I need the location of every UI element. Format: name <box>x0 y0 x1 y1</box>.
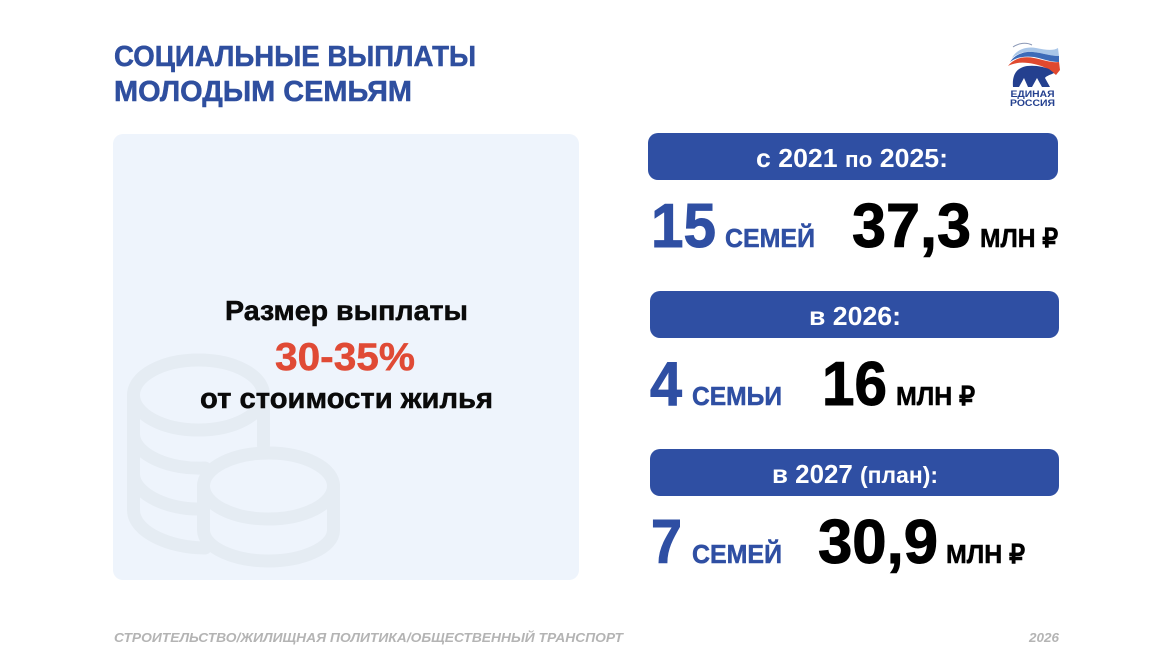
panel: payment size <box>113 134 579 580</box>
panel: 2021–2025: 37,3 <box>852 192 971 261</box>
icon: coins <box>134 360 334 561</box>
panel: 2021–2025: СЕМЕЙ <box>725 223 815 253</box>
title: СОЦИАЛЬНЫЕ ВЫПЛАТЫ <box>114 41 476 73</box>
text: payment size <box>200 295 493 415</box>
footer <box>114 629 1060 645</box>
panel: 2021–2025: 15 <box>651 192 716 261</box>
text: payment size: от стоимости жилья <box>200 383 493 415</box>
footer: 2026 <box>1028 630 1060 645</box>
logo: Единая Россия: ЕДИНАЯ <box>1010 89 1055 100</box>
panel: 2027 plan: 30,9 <box>818 508 938 577</box>
panel: 2026: СЕМЬИ <box>692 381 782 411</box>
panel: 2026: 16 <box>822 350 887 419</box>
panel: 2021–2025 <box>648 133 1058 261</box>
footer: СТРОИТЕЛЬСТВО/ЖИЛИЩНАЯ ПОЛИТИКА/ОБЩЕСТВЕННЫЙ ТРАНСПОРТ <box>114 629 624 645</box>
logo: Единая Россия: РОССИЯ <box>1010 98 1055 109</box>
panel: 2027 plan: в 2027 (план): <box>772 459 938 489</box>
text: payment size: Размер выплаты <box>225 295 468 326</box>
title: МОЛОДЫМ СЕМЬЯМ <box>114 76 412 108</box>
panel: 2027 plan <box>650 449 1059 577</box>
panel: 2027 plan: МЛН ₽ <box>946 539 1025 569</box>
panel: 2027 plan: СЕМЕЙ <box>692 539 782 569</box>
logo: Единая Россия <box>1008 43 1060 109</box>
title <box>114 41 476 108</box>
panel: 2026 <box>650 291 1059 419</box>
panel: 2026: 4 <box>650 350 682 419</box>
panel: 2026: в 2026: <box>809 301 901 331</box>
panel: 2021–2025: МЛН ₽ <box>980 223 1058 253</box>
text: payment size: 30-35% <box>275 336 415 379</box>
panel: 2027 plan: 7 <box>651 508 682 577</box>
panel: 2021–2025: с 2021 по 2025: <box>756 143 948 173</box>
panel: 2026: МЛН ₽ <box>896 381 975 411</box>
